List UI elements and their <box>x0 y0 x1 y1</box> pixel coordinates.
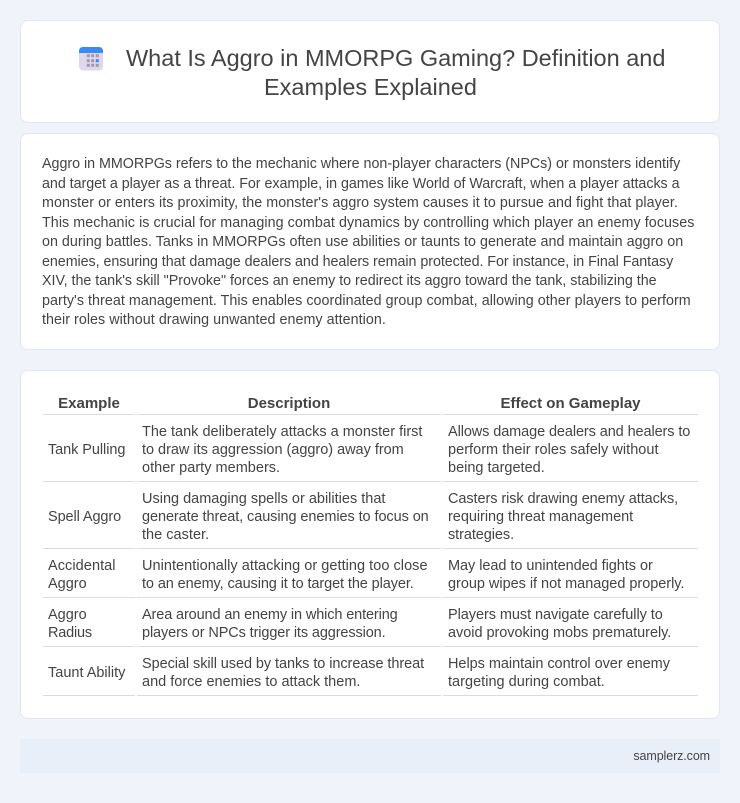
row: Aggro Radius: Aggro <box>48 607 87 623</box>
row: Spell Aggro: the caster. <box>142 527 209 543</box>
paragraph text: on during battles. Tanks in MMORPGs often use abilities or taunts to generate and maintain aggro on <box>42 234 683 250</box>
row: Taunt Ability: Helps maintain control over enemy <box>448 656 670 672</box>
row: Taunt Ability: targeting during combat. <box>448 674 605 690</box>
row: Spell Aggro: Spell Aggro <box>48 509 121 525</box>
row: Tank Pulling: to draw its aggression (aggro) away from <box>142 442 404 458</box>
paragraph text: party's threat management. This enables coordinated group combat, allowing other players to perform <box>42 292 691 308</box>
row: Tank Pulling <box>48 424 690 476</box>
row: Tank Pulling: other party members. <box>142 460 280 476</box>
table header: Effect on Gameplay <box>500 395 641 412</box>
row: Accidental Aggro <box>48 558 684 592</box>
table header <box>58 395 641 412</box>
paragraph text: and target a player as a threat. For example, in games like World of Warcraft, when a player attacks a <box>42 176 679 192</box>
paragraph text: their roles without drawing unwanted enemy attention. <box>42 312 386 328</box>
row: Spell Aggro: requiring threat management <box>448 509 633 525</box>
panel: definition paragraph <box>20 133 720 350</box>
row: Spell Aggro: generate threat, causing enemies to focus on <box>142 509 429 525</box>
table header: Example <box>58 395 120 412</box>
paragraph text: Aggro in MMORPGs refers to the mechanic where non-player characters (NPCs) or monsters identify <box>42 156 680 172</box>
icon: calendar <box>79 47 103 70</box>
row: Aggro Radius: Players must navigate carefully to <box>448 607 663 623</box>
row: Accidental Aggro: Accidental <box>48 558 116 574</box>
row: Accidental Aggro: group wipes if not managed properly. <box>448 576 684 592</box>
row: Taunt Ability: and force enemies to attack them. <box>142 674 360 690</box>
row: Accidental Aggro: to an enemy, causing it to target the player. <box>142 576 414 592</box>
row: Tank Pulling: being targeted. <box>448 460 545 476</box>
row: Spell Aggro: Using damaging spells or abilities that <box>142 491 385 507</box>
row: Taunt Ability: Special skill used by tanks to increase threat <box>142 656 424 672</box>
row: Tank Pulling: perform their roles safely without <box>448 442 659 458</box>
paragraph text: This mechanic is crucial for managing combat dynamics by controlling which player an enemy focuses <box>42 214 695 230</box>
row: Accidental Aggro: Unintentionally attacking or getting too close <box>142 558 428 574</box>
table header: Description <box>248 395 330 412</box>
paragraph text: XIV, the tank's skill "Provoke" forces an enemy to redirect its aggro toward the tank, stabilizing the <box>42 273 657 289</box>
title: Examples Explained <box>264 74 477 100</box>
panel: examples table <box>20 370 720 719</box>
row: Aggro Radius: Area around an enemy in which entering <box>142 607 398 623</box>
footer bar <box>20 739 720 773</box>
row: Tank Pulling: Allows damage dealers and healers to <box>448 424 690 440</box>
row: Spell Aggro: strategies. <box>448 527 514 543</box>
footer text: samplerz.com <box>633 749 710 763</box>
row: Accidental Aggro: May lead to unintended fights or <box>448 558 653 574</box>
header panel <box>20 20 720 123</box>
title <box>126 45 665 100</box>
paragraph text: enemies, ensuring that damage dealers and healers remain protected. For instance, in Final Fantasy <box>42 254 673 270</box>
row: Spell Aggro: Casters risk drawing enemy attacks, <box>448 491 678 507</box>
row: Tank Pulling: Tank Pulling <box>48 442 125 458</box>
row: Aggro Radius <box>48 607 671 641</box>
row: Aggro Radius: Radius <box>48 625 92 641</box>
paragraph text <box>42 156 695 328</box>
row: Aggro Radius: avoid provoking mobs prematurely. <box>448 625 671 641</box>
row: Aggro Radius: players or NPCs trigger its aggression. <box>142 625 386 641</box>
row: Taunt Ability <box>48 656 670 690</box>
row: Taunt Ability: Taunt Ability <box>48 665 125 681</box>
row: Tank Pulling: The tank deliberately attacks a monster first <box>142 424 422 440</box>
title: What Is Aggro in MMORPG Gaming? Definition and <box>126 45 665 71</box>
row: Spell Aggro <box>48 491 678 543</box>
paragraph text: monster or enters its proximity, the monster's aggro system causes it to pursue and fight that player. <box>42 195 678 211</box>
row: Accidental Aggro: Aggro <box>48 576 87 592</box>
